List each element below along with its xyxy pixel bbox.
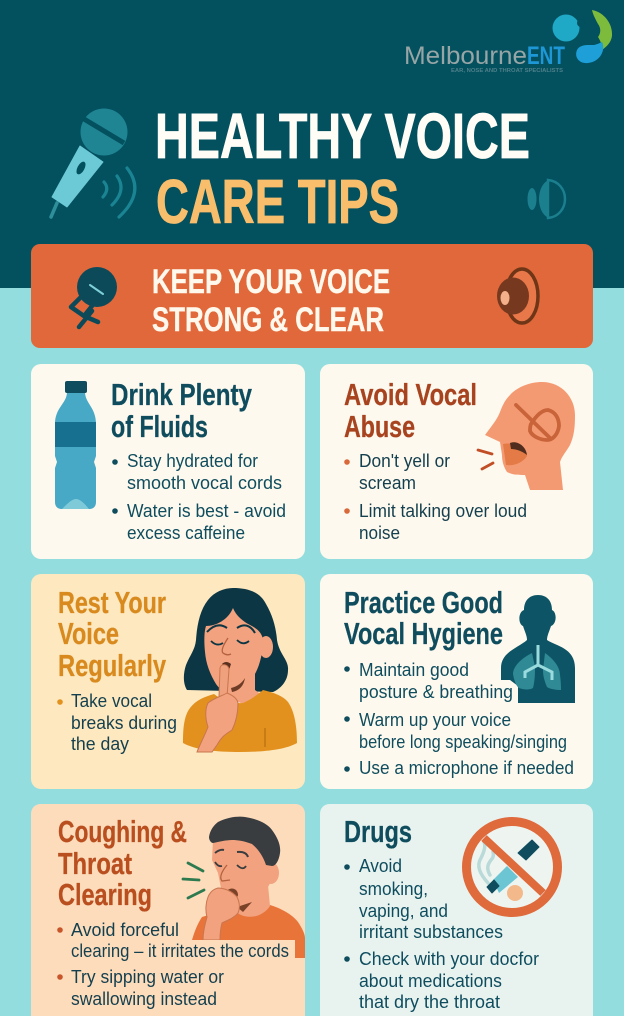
bullets: [344, 450, 527, 543]
bullets: [57, 919, 289, 1009]
icon: water bottle: [55, 381, 96, 509]
heading: Clearing: [58, 877, 152, 912]
bullets: Use a microphone if needed: [359, 757, 574, 778]
bullets: Warm up your voice: [359, 709, 511, 730]
panel: drugs: [320, 804, 593, 1016]
heading: [58, 814, 187, 912]
icon: half ear: [528, 180, 565, 218]
panel: avoid vocal abuse: [320, 364, 593, 559]
heading: Rest Your: [58, 585, 166, 620]
bullets: Check with your docfor: [359, 948, 539, 969]
bullets: Take vocal: [71, 690, 152, 711]
heading: Coughing &: [58, 814, 187, 849]
logo: Melbourne ENT: [404, 10, 612, 74]
bullets: Try sipping water or: [71, 966, 224, 987]
heading: Voice: [58, 616, 119, 651]
bullets: Water is best - avoid: [127, 500, 286, 521]
logo: Melbourne ENT: EAR, NOSE AND THROAT SPECIALISTS: [451, 68, 563, 74]
bullets: irritant substances: [359, 921, 503, 942]
icon: banner microphone: [71, 267, 117, 327]
bullets: swallowing instead: [71, 988, 217, 1009]
heading: Regularly: [58, 648, 167, 683]
panel: rest your voice regularly: [31, 574, 305, 789]
icon: silhouette with lungs: [501, 595, 575, 703]
illustration: woman shushing: [183, 588, 297, 752]
logo: Melbourne ENT: ENT: [527, 42, 565, 70]
banner text: STRONG & CLEAR: [152, 301, 384, 339]
bullets: clearing – it irritates the cords: [71, 940, 289, 961]
bullets: about medications: [359, 970, 502, 991]
panel: practice good vocal hygiene: [320, 574, 593, 789]
bullets: vaping, and: [359, 900, 448, 921]
banner: [31, 244, 593, 348]
panel: drink plenty of fluids: [31, 364, 305, 559]
icon: head with crossed throat: [478, 382, 575, 490]
bullets: smoking,: [359, 878, 428, 899]
logo: Melbourne ENT: Melbourne: [404, 42, 527, 70]
heading: Abuse: [344, 409, 415, 444]
heading: Drink Plenty: [111, 377, 253, 412]
bullets: the day: [71, 733, 130, 754]
heading: [58, 585, 167, 683]
heading: Practice Good: [344, 585, 503, 620]
bullets: that dry the throat: [359, 991, 500, 1012]
panel: coughing and throat clearing: [31, 804, 305, 1016]
illustration: man coughing: [176, 817, 305, 960]
icon: microphone: [51, 108, 135, 217]
icon: no smoking: [466, 822, 558, 912]
bullets: Avoid: [359, 855, 402, 876]
heading: of Fluids: [111, 409, 208, 444]
heading: [344, 377, 477, 444]
icon: banner ear: [497, 269, 538, 323]
bullets: [57, 690, 177, 754]
heading: Vocal Hygiene: [344, 616, 503, 651]
heading: Drugs: [344, 814, 412, 849]
bullets: Avoid forceful: [71, 919, 179, 940]
bullets: [344, 855, 539, 1012]
heading: [111, 377, 253, 444]
heading: [344, 585, 503, 651]
heading: Avoid Vocal: [344, 377, 477, 412]
bullets: scream: [359, 472, 416, 493]
bullets: Stay hydrated for: [127, 450, 258, 471]
bullets: Maintain good: [359, 659, 469, 680]
bullets: Don't yell or: [359, 450, 450, 471]
banner text: [152, 263, 390, 339]
banner text: KEEP YOUR VOICE: [152, 263, 390, 301]
bullets: breaks during: [71, 712, 177, 733]
bullets: noise: [359, 522, 400, 543]
title: [155, 100, 530, 237]
bullets: before long speaking/singing: [359, 731, 567, 752]
bullets: excess caffeine: [127, 522, 245, 543]
bullets: [344, 659, 574, 778]
bullets: [112, 450, 286, 543]
bullets: smooth vocal cords: [127, 472, 282, 493]
bullets: Limit talking over loud: [359, 500, 527, 521]
bullets: posture & breathing: [359, 681, 513, 702]
title: CARE TIPS: [156, 168, 399, 237]
heading: Throat: [58, 846, 132, 881]
